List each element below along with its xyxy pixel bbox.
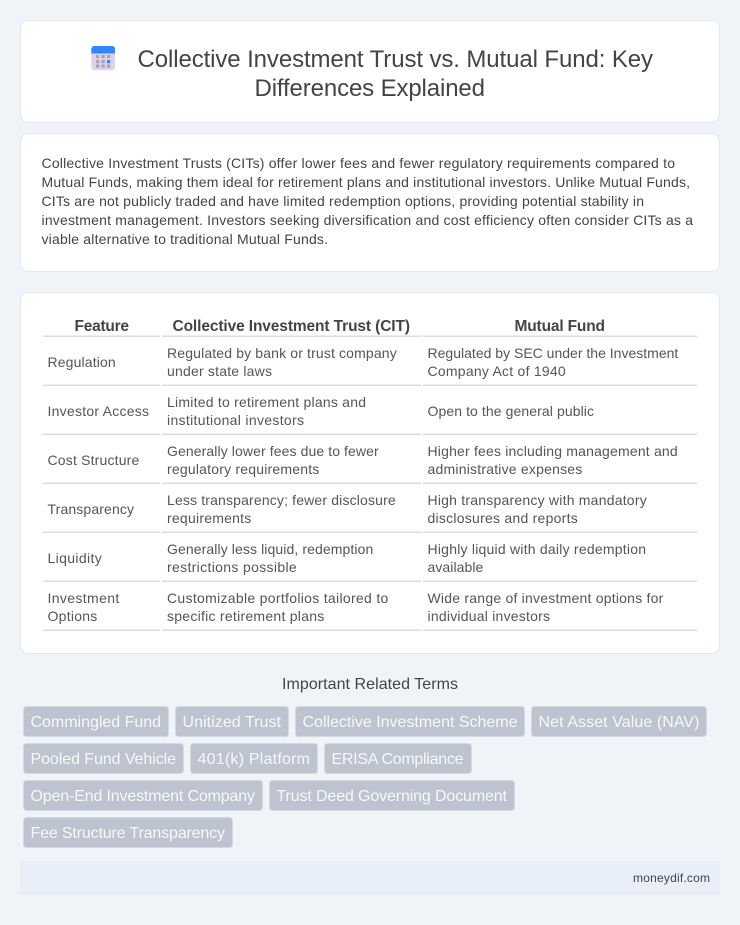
row: Transparency: disclosures and reports bbox=[428, 510, 578, 526]
table header row bbox=[74, 318, 605, 335]
tag: Net Asset Value: Net Asset Value (NAV) bbox=[538, 714, 700, 731]
row: Transparency: High transparency with mandatory bbox=[428, 492, 647, 508]
intro paragraph bbox=[42, 155, 693, 247]
tag: Trust Deed Governing Document bbox=[270, 780, 514, 810]
intro paragraph: Mutual Funds, making them ideal for retirement plans and institutional investors. Unlike Mutual Funds, bbox=[42, 174, 690, 190]
tag: Commingled Fund: Commingled Fund bbox=[30, 714, 161, 731]
heading: related terms: Important Related Terms bbox=[282, 676, 458, 693]
tag: Pooled Fund Vehicle bbox=[24, 744, 184, 774]
tag: Pooled Fund Vehicle: Pooled Fund Vehicle bbox=[30, 751, 176, 768]
row: Investor Access bbox=[48, 394, 594, 428]
row: Investment Options: Options bbox=[48, 608, 97, 624]
tag: ERISA Compliance bbox=[324, 744, 472, 774]
row: Liquidity: Liquidity bbox=[48, 550, 102, 566]
row: Cost Structure: Cost Structure bbox=[48, 452, 140, 468]
intro paragraph: Collective Investment Trusts (CITs) offer lower fees and fewer regulatory requirements compared to bbox=[42, 155, 675, 171]
row: Transparency bbox=[48, 492, 647, 526]
panel: intro text bbox=[20, 134, 720, 272]
tag: Trust Deed Governing Document: Trust Deed Governing Document bbox=[276, 788, 508, 805]
row: Cost Structure: Higher fees including management and bbox=[428, 443, 678, 459]
tag: Net Asset Value bbox=[532, 706, 706, 736]
tag: Unitized Trust: Unitized Trust bbox=[182, 714, 282, 731]
tag: Open-End Investment Company bbox=[24, 780, 262, 810]
tag: 401(k) Platform: 401(k) Platform bbox=[198, 751, 310, 768]
tag: Collective Investment Scheme bbox=[296, 706, 524, 736]
tag: 401(k) Platform bbox=[190, 744, 318, 774]
row: Transparency: requirements bbox=[167, 510, 251, 526]
row: Cost Structure: administrative expenses bbox=[428, 461, 582, 477]
row: Investor Access: Open to the general public bbox=[428, 403, 594, 419]
panel: comparison table bbox=[20, 292, 720, 654]
intro paragraph: viable alternative to traditional Mutual Funds. bbox=[42, 231, 328, 247]
row: Regulation: under state laws bbox=[167, 363, 272, 379]
row: Transparency: Transparency bbox=[48, 501, 134, 517]
row: Investor Access: Investor Access bbox=[48, 403, 149, 419]
icon: calendar bbox=[91, 46, 115, 70]
title bbox=[138, 46, 653, 102]
row: Regulation: Company Act of 1940 bbox=[428, 363, 566, 379]
row: Investment Options: specific retirement plans bbox=[167, 608, 324, 624]
row: Liquidity: available bbox=[428, 559, 484, 575]
tag: Open-End Investment Company: Open-End Investment Company bbox=[30, 788, 255, 805]
tag: Fee Structure Transparency bbox=[24, 818, 232, 848]
row: Transparency: Less transparency; fewer disclosure bbox=[167, 492, 396, 508]
title: Collective Investment Trust vs. Mutual Fund: Key bbox=[138, 46, 653, 73]
row: Cost Structure: Generally lower fees due to fewer bbox=[167, 443, 379, 459]
row: Regulation: Regulated by SEC under the Investment bbox=[428, 345, 678, 361]
row: Cost Structure: regulatory requirements bbox=[167, 461, 319, 477]
row: Investment Options: Wide range of investment options for bbox=[428, 590, 664, 606]
table header row: Feature bbox=[74, 318, 129, 335]
tag: Fee Structure Transparency: Fee Structure Transparency bbox=[30, 825, 225, 842]
footer source: moneydif.com bbox=[633, 871, 710, 885]
tag: Collective Investment Scheme: Collective Investment Scheme bbox=[302, 714, 518, 731]
row: Liquidity: restrictions possible bbox=[167, 559, 297, 575]
row: Regulation: Regulated by bank or trust company bbox=[167, 345, 397, 361]
footer bar bbox=[20, 861, 720, 895]
row: Investment Options bbox=[48, 590, 664, 624]
row: Liquidity bbox=[48, 541, 646, 575]
row: Investor Access: institutional investors bbox=[167, 412, 304, 428]
row: Regulation bbox=[48, 345, 678, 379]
row: Investment Options: individual investors bbox=[428, 608, 550, 624]
tag: ERISA Compliance: ERISA Compliance bbox=[332, 751, 464, 768]
intro paragraph: CITs are not publicly traded and have limited redemption options, providing potential stability in bbox=[42, 193, 644, 209]
intro paragraph: investment management. Investors seeking diversification and cost efficiency often consider CITs as a bbox=[42, 212, 693, 228]
tag: Commingled Fund bbox=[24, 706, 168, 736]
row: Cost Structure bbox=[48, 443, 678, 477]
row: Investor Access: Limited to retirement plans and bbox=[167, 394, 366, 410]
row: Liquidity: Highly liquid with daily redemption bbox=[428, 541, 646, 557]
row: Regulation: Regulation bbox=[48, 354, 116, 370]
title: Differences Explained bbox=[254, 75, 485, 102]
table header row: Mutual Fund bbox=[514, 318, 605, 335]
related term tags bbox=[24, 706, 706, 848]
panel: header bbox=[20, 20, 720, 122]
table header row: Collective Investment Trust (CIT) bbox=[172, 318, 410, 335]
row: Investment Options: Customizable portfolios tailored to bbox=[167, 590, 389, 606]
row: Investment Options: Investment bbox=[48, 590, 119, 606]
row: Liquidity: Generally less liquid, redemption bbox=[167, 541, 373, 557]
tag: Unitized Trust bbox=[176, 706, 288, 736]
